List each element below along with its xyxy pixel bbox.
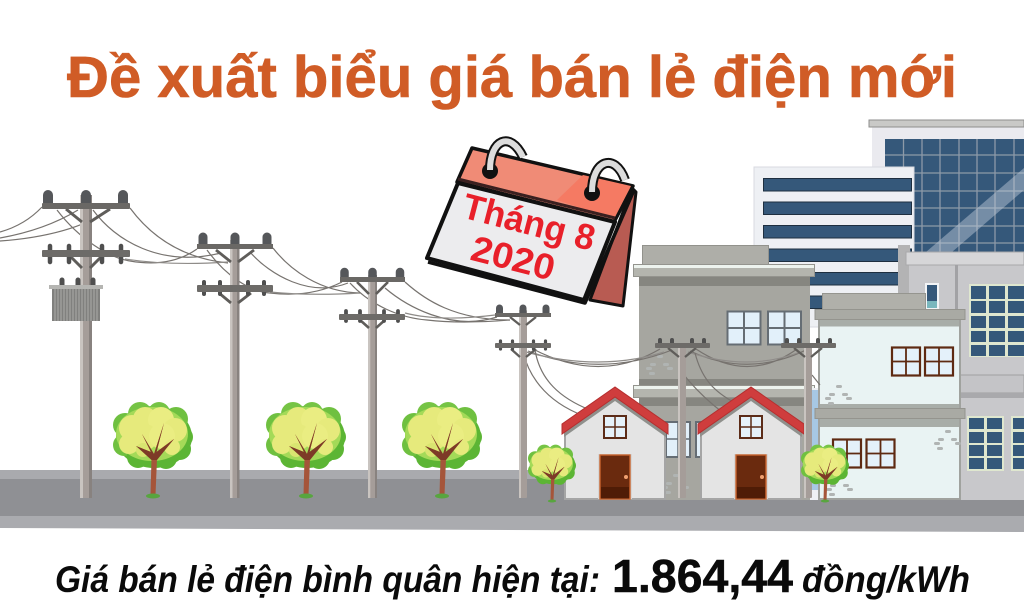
transformer xyxy=(49,280,103,321)
pole 2 xyxy=(197,237,273,498)
upper navy window xyxy=(969,284,1024,357)
calendar year label: 2020 xyxy=(467,227,559,288)
lower navy windows xyxy=(967,416,1024,471)
small tree 1 xyxy=(528,445,576,502)
house 2 xyxy=(698,387,804,499)
title: Đề xuất biểu giá bán lẻ điện mới xyxy=(67,45,957,110)
calendar back leaf xyxy=(590,188,636,306)
price value: 1.864,44 xyxy=(612,550,793,602)
footer label: Giá bán lẻ điện bình quân hiện tại: xyxy=(55,559,600,600)
calendar ring right xyxy=(584,163,625,201)
small tree 2 xyxy=(801,445,849,502)
tree 2 xyxy=(266,402,346,498)
ground road xyxy=(0,470,1024,532)
white striped building xyxy=(754,167,914,327)
small blue window xyxy=(925,283,939,309)
pole 4 xyxy=(495,308,551,498)
pole 6 xyxy=(781,340,836,498)
house 1 xyxy=(562,387,668,499)
pole 5 xyxy=(655,340,710,498)
price unit: đồng/kWh xyxy=(802,559,970,600)
calendar month label: Tháng 8 xyxy=(459,185,600,259)
calendar header xyxy=(457,148,633,222)
footer price line xyxy=(55,550,970,602)
pole 1 with transformer xyxy=(42,195,130,498)
power lines xyxy=(0,207,820,418)
tree 3 xyxy=(402,402,482,498)
tree 1 xyxy=(113,402,193,498)
calendar ring left xyxy=(482,141,523,179)
pale green building xyxy=(815,294,965,499)
narrow blue window strip xyxy=(810,388,819,500)
calendar page xyxy=(427,183,615,300)
calendar xyxy=(427,141,636,306)
right grey building xyxy=(906,252,1024,500)
dark grey building xyxy=(634,246,814,500)
glass office tower xyxy=(869,120,1024,255)
pole 3 xyxy=(339,272,405,498)
